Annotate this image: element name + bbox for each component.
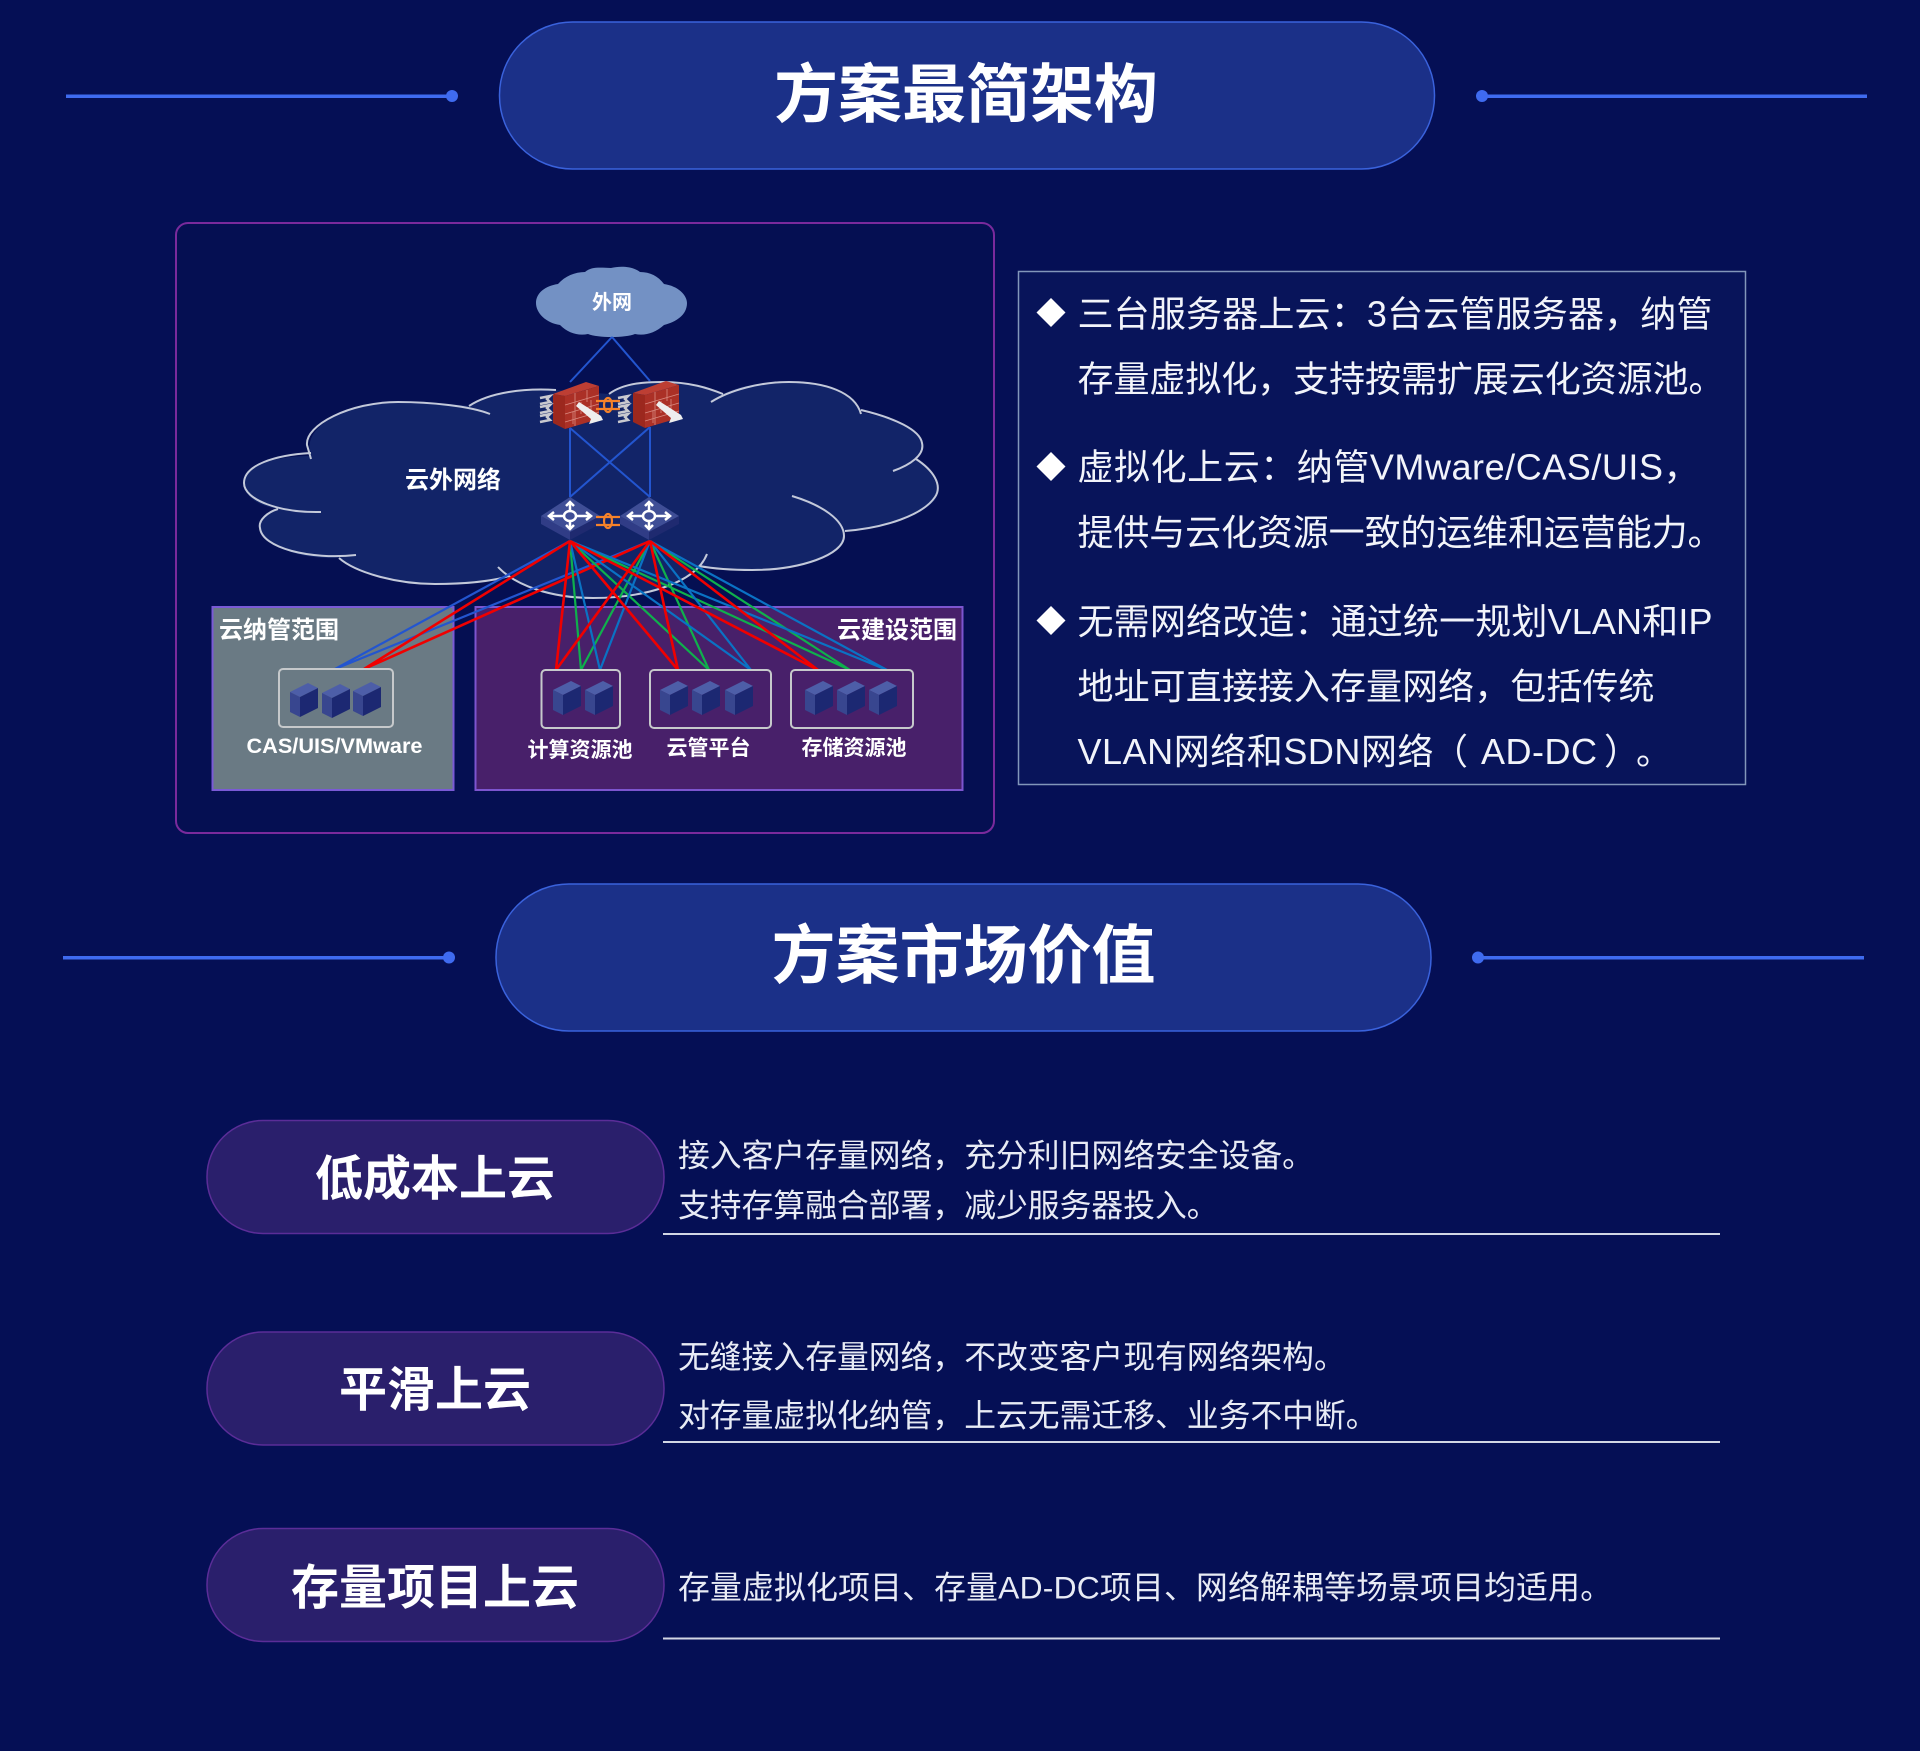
value row: 平滑上云 [207, 1332, 1720, 1445]
node: 云管平台 [650, 670, 771, 760]
value row: 低成本上云: 低成本上云 [315, 1153, 555, 1206]
panel: 云建设范围: 云建设范围 [837, 617, 957, 644]
panel: 云纳管范围 [212, 607, 454, 790]
icon: bullet diamond 3 [1036, 606, 1066, 635]
icons: switches [541, 497, 679, 540]
value row: 低成本上云 [207, 1120, 1720, 1235]
value row: 平滑上云: 对存量虚拟化纳管，上云无需迁移、业务不中断。 [678, 1398, 1378, 1434]
node: 存储资源池 [791, 670, 913, 760]
panel: solution bullet list [1018, 272, 1746, 784]
value row: 平滑上云: 平滑上云 [339, 1364, 531, 1417]
icon: bullet diamond 1 [1036, 298, 1066, 327]
node: 计算资源池: 计算资源池 [528, 739, 632, 762]
text: bullet 1: 存量虚拟化，支持按需扩展云化资源池。 [1078, 358, 1724, 400]
section header: 方案最简架构: 方案最简架构 [774, 59, 1158, 131]
text: bullet 3: ） [1604, 731, 1640, 772]
links: fan-out to resource pools [335, 541, 887, 670]
section header: 方案最简架构 [66, 22, 1867, 169]
value row: 低成本上云: 接入客户存量网络，充分利旧网络安全设备。 [678, 1138, 1314, 1174]
value row: 存量项目上云: 存量项目上云 [291, 1562, 579, 1615]
panel: 云纳管范围: 云纳管范围 [219, 617, 339, 644]
text: bullet 1: 三台服务器上云：3台云管服务器，纳管 [1078, 294, 1712, 334]
text: bullet 3: （ [1432, 731, 1468, 772]
node: CAS/UIS/VMware [246, 669, 422, 758]
text: bullet 3: 无需网络改造：通过统一规划VLAN和IP [1078, 601, 1712, 642]
text: bullet 3 [1078, 601, 1712, 772]
value row: 存量项目上云: 存量虚拟化项目、存量AD-DC项目、网络解耦等场景项目均适用。 [678, 1570, 1612, 1606]
cloud: 外网: 外网 [592, 291, 632, 314]
icons: firewalls [540, 381, 683, 429]
text: bullet 3: AD-DC [1481, 731, 1597, 772]
value row: 存量项目上云 [207, 1528, 1720, 1642]
icon: bullet diamond 2 [1036, 452, 1066, 481]
value row: 低成本上云: 支持存算融合部署，减少服务器投入。 [678, 1188, 1219, 1224]
node: 存储资源池: 存储资源池 [802, 737, 906, 760]
node: CAS/UIS/VMware: CAS/UIS/VMware [246, 735, 422, 758]
text: bullet 3: 地址可直接接入存量网络，包括传统 [1078, 666, 1654, 707]
cloud: 云外网络 [244, 382, 938, 598]
panel: 云建设范围 [476, 607, 962, 790]
cloud: 外网 [536, 267, 687, 337]
icon: switch link [596, 514, 620, 528]
node: 云管平台: 云管平台 [666, 736, 750, 760]
text: bullet 2 [1078, 446, 1724, 553]
text: bullet 1 [1078, 294, 1724, 400]
node: 计算资源池 [528, 670, 632, 762]
icon: firewall link [596, 398, 620, 412]
cloud: 云外网络: 云外网络 [405, 466, 501, 494]
value row: 平滑上云: 无缝接入存量网络，不改变客户现有网络架构。 [678, 1339, 1346, 1375]
section header: 方案市场价值 [63, 884, 1864, 1031]
text: bullet 3: 。 [1636, 731, 1672, 772]
text: bullet 3: VLAN网络和SDN网络 [1078, 731, 1434, 772]
links: firewall and switch uplinks [570, 337, 650, 497]
text: bullet 2: 提供与云化资源一致的运维和运营能力。 [1078, 512, 1724, 553]
panel: architecture diagram [176, 223, 994, 833]
section header: 方案市场价值: 方案市场价值 [772, 920, 1156, 992]
text: bullet 2: 虚拟化上云：纳管VMware/CAS/UIS， [1078, 446, 1700, 488]
